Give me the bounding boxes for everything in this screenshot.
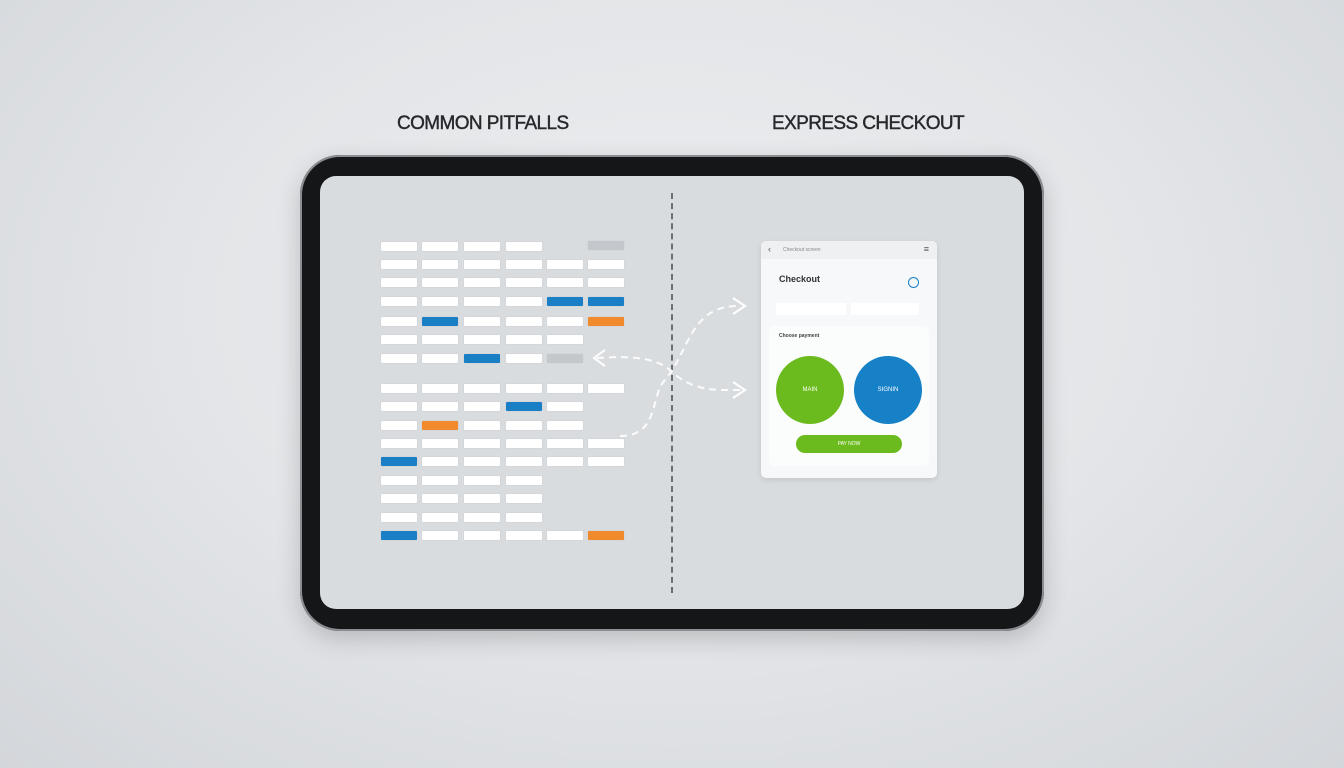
- card header: ‹: [768, 244, 771, 254]
- tablet device: [300, 155, 1044, 631]
- green button: PAY NOW: [838, 441, 860, 447]
- divider: [671, 193, 673, 593]
- icon: info circle: [908, 277, 919, 288]
- title: common pitfalls: COMMON PITFALLS: [397, 113, 569, 134]
- payment options panel: Choose payment: [779, 333, 819, 339]
- checkout card: [761, 241, 937, 478]
- blue option: SIGNIN: [878, 387, 898, 393]
- title: express checkout: EXPRESS CHECKOUT: [772, 113, 964, 134]
- screen: [320, 176, 1024, 609]
- green option: MAIN: [802, 387, 818, 393]
- card header: [761, 241, 937, 259]
- checkout heading: Checkout: [779, 274, 820, 284]
- green option: [776, 356, 844, 424]
- green button: [796, 435, 902, 453]
- payment options panel: [769, 326, 929, 466]
- blue option: [854, 356, 922, 424]
- card header: ≡: [924, 244, 929, 254]
- inputs: [776, 303, 846, 315]
- card header: Checkout screen: [783, 247, 821, 253]
